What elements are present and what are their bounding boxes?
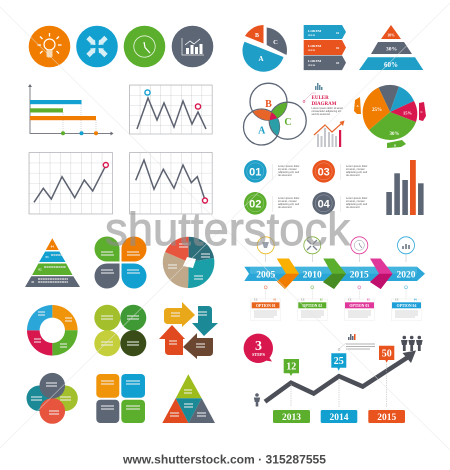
growth arrow (265, 350, 416, 402)
numbered item 04: adipiscing elit, sed (346, 202, 368, 206)
mini growth chart (314, 120, 344, 147)
donut diagram (27, 305, 78, 356)
layered pyramid: 04 (51, 244, 54, 248)
icon: four arrows (76, 26, 118, 67)
option 03 card: OPTION 03 (349, 304, 369, 308)
year label 2015 (368, 410, 405, 423)
euler venn diagram (244, 83, 306, 145)
watermark text: shutterstock (105, 203, 351, 255)
layered pyramid: 03 (46, 255, 49, 259)
big pie chart: A (356, 104, 360, 108)
pyramid percentages (359, 25, 423, 70)
option 04 card (392, 286, 422, 320)
option 02 card: OPTION 02 (302, 304, 322, 308)
timeline arrow band: 2020 (396, 270, 416, 280)
numbered item 04: Lorem ipsum dolor (346, 196, 368, 200)
option 03 card: CC (348, 298, 352, 302)
numbered item 03: do eiusmod (346, 173, 360, 177)
option 01 card (250, 286, 280, 320)
numbered item 02: Lorem ipsum dolor (278, 196, 300, 200)
big pie chart: 25% (372, 108, 382, 113)
list of three lorem labels: LOREM (308, 29, 322, 33)
icon: chart (172, 26, 213, 67)
list of three lorem labels: 03 (336, 61, 340, 65)
list of three lorem labels: IPSUM (308, 50, 315, 52)
icon: single person (254, 393, 260, 406)
four petal diagram (95, 237, 146, 288)
big pie chart: C (420, 110, 423, 114)
swirl circle diagram (163, 237, 214, 288)
list of three lorem labels: IPSUM (308, 65, 315, 67)
option 03 card (344, 286, 374, 320)
pie chart ABC: B (255, 33, 259, 39)
numbered item 04: sit amet, consec (346, 199, 365, 203)
euler venn diagram: B (265, 99, 272, 110)
option 04 card: 04 (414, 298, 417, 302)
column chart (386, 160, 424, 215)
euler diagram heading: Lorem ipsum dolor sit amet (312, 106, 343, 110)
numbered item 02: adipiscing elit, sed (278, 202, 300, 206)
pyramid percentages: 60% (384, 61, 398, 69)
layered pyramid (25, 238, 80, 287)
timeline icons (257, 237, 414, 262)
euler diagram heading (303, 83, 343, 116)
pyramid percentages: 30% (386, 46, 397, 52)
big pie chart: 30% (390, 132, 400, 137)
icon: light bulb (29, 26, 70, 67)
year label 2014 (321, 410, 357, 423)
option 02 card (298, 286, 328, 320)
layered pyramid: 01 (32, 280, 35, 284)
four rounded squares (96, 374, 145, 423)
numbered item 04: 04 (318, 198, 331, 210)
numbered item 02: do eiusmod (278, 205, 292, 209)
numbered item 01 (244, 160, 300, 183)
option 02 card: 02 (320, 298, 323, 302)
pie chart ABC: C (273, 39, 278, 46)
line chart: falling (130, 152, 212, 214)
numbered item 03: 03 (318, 166, 330, 178)
year label 2013: 2013 (282, 413, 301, 423)
value callout 25: 25 (334, 356, 344, 367)
triangle split diagram (162, 374, 215, 423)
numbered item 03: adipiscing elit, sed (346, 170, 368, 174)
layered pyramid: 02 (38, 268, 42, 272)
option 01 card: OPTION 01 (256, 304, 276, 308)
euler diagram heading: sed do eiusmod (312, 112, 330, 116)
list of three lorem labels (304, 25, 346, 70)
numbered item 03: sit amet, consec (346, 167, 365, 171)
timeline arrow band: 2005 (256, 270, 275, 280)
timeline arrow band: 2010 (303, 270, 322, 280)
list of three lorem labels: 01 (336, 31, 340, 35)
line chart: two markers (130, 85, 212, 134)
timeline arrow band: 2015 (350, 270, 369, 280)
numbered item 03 (312, 160, 368, 183)
four overlapping colour circles (26, 373, 78, 424)
dashed year connectors (291, 364, 387, 407)
big pie chart (354, 85, 426, 148)
option 02 card: CC (301, 298, 305, 302)
euler diagram heading: consectetur adipiscing elit (312, 109, 341, 113)
year label 2013 (273, 410, 310, 423)
value callout 12 (284, 359, 299, 376)
numbered item 01: 01 (249, 166, 261, 178)
euler diagram heading: DIAGRAM (312, 102, 337, 107)
pie chart ABC: A (258, 55, 264, 63)
four cycle arrows (159, 302, 218, 359)
value callout 25 (331, 353, 346, 371)
year label 2015: 2015 (377, 413, 396, 423)
numbered item 02: sit amet, consec (278, 199, 297, 203)
numbered item 03: Lorem ipsum dolor (346, 164, 368, 168)
option 03 card: 03 (367, 298, 370, 302)
euler diagram heading: EULER (312, 96, 329, 101)
numbered item 01: Lorem ipsum dolor (278, 164, 300, 168)
3 steps badge (244, 334, 273, 363)
option 04 card: CC (395, 298, 399, 302)
option 01 card: CC (254, 298, 258, 302)
list of three lorem labels: 02 (336, 46, 340, 50)
list of three lorem labels: LOREM (308, 59, 322, 63)
numbered item 01: adipiscing elit, sed (278, 170, 300, 174)
mini chart note (338, 334, 375, 350)
line chart: rising (29, 152, 112, 214)
option 04 card: OPTION 04 (397, 304, 416, 308)
numbered item 02: 02 (249, 198, 261, 210)
list of three lorem labels: IPSUM (308, 35, 315, 37)
numbered item 04: do eiusmod (346, 205, 360, 209)
value callout 50 (379, 346, 394, 363)
numbered item 04 (312, 192, 368, 215)
euler venn diagram: A (258, 126, 266, 136)
option 01 card: 01 (274, 298, 277, 302)
list of three lorem labels: LOREM (308, 44, 322, 48)
footer stock id: www.shutterstock.com · 315287555 (122, 454, 327, 466)
pie chart ABC (242, 25, 287, 72)
numbered item 01: do eiusmod (278, 173, 292, 177)
big pie chart: 15% (403, 110, 412, 116)
icon: clock (124, 26, 165, 67)
year label 2014: 2014 (330, 413, 349, 423)
icon: three people (401, 336, 423, 351)
value callout 50: 50 (382, 348, 392, 359)
3 steps badge: STEPS (252, 352, 266, 357)
numbered item 02 (244, 192, 300, 215)
euler venn diagram: C (284, 117, 292, 128)
big pie chart: B (394, 144, 396, 148)
numbered item 01: sit amet, consec (278, 167, 297, 171)
bar chart (28, 84, 114, 136)
timeline arrow band (244, 258, 425, 289)
pyramid percentages: 10% (387, 34, 395, 38)
3 steps badge: 3 (255, 339, 262, 354)
value callout 12: 12 (286, 362, 296, 373)
four overlapping green circles (94, 305, 146, 356)
